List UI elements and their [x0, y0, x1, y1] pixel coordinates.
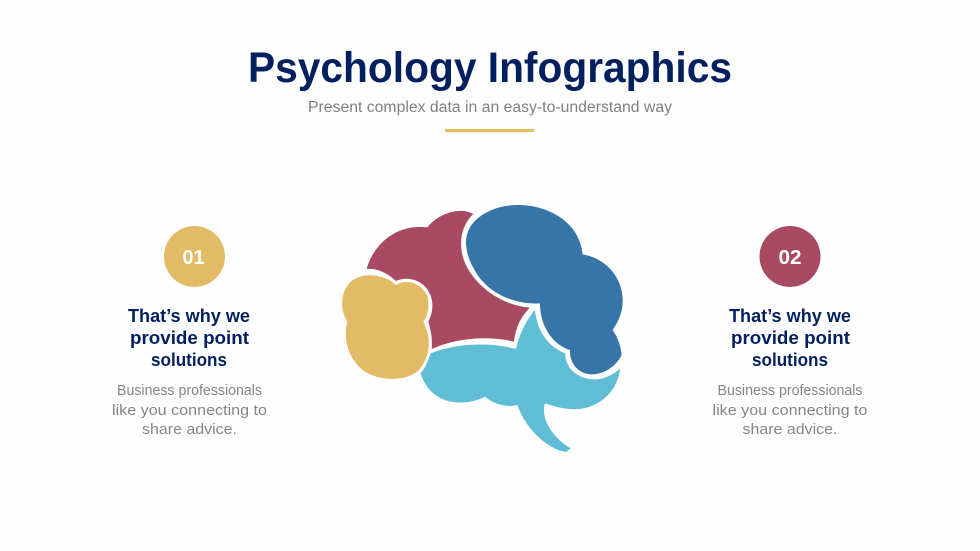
brain lobe: teal: [421, 310, 620, 452]
body text 01: Business professionals: [117, 383, 262, 399]
body text 01: share advice.: [142, 422, 237, 438]
heading 02: solutions: [752, 349, 828, 370]
heading 01: provide point: [130, 327, 249, 348]
body text 02: share advice.: [742, 422, 838, 438]
badge 02: [760, 226, 820, 287]
body text 02: Business professionals: [718, 383, 862, 399]
brain illustration: [342, 205, 623, 452]
brain lobe: red: [367, 211, 530, 349]
badge 02: 02: [778, 247, 802, 269]
brain lobe: blue: [466, 205, 623, 374]
heading 01: solutions: [151, 349, 227, 370]
heading 01: [128, 305, 250, 370]
badge 01: 01: [182, 247, 204, 269]
heading 02: provide point: [731, 327, 850, 348]
heading 02: [729, 305, 851, 370]
body text 01: like you connecting to: [112, 403, 267, 419]
brain lobe: yellow: [342, 275, 429, 379]
heading 01: That’s why we: [128, 305, 250, 326]
panel: point 02: [712, 226, 868, 438]
title underline: [445, 129, 534, 132]
subtitle: Present complex data in an easy-to-understand way: [308, 99, 672, 116]
body text 01: [112, 383, 267, 438]
title: Psychology Infographics: [248, 44, 732, 92]
panel: point 01: [112, 226, 267, 438]
body text 02: like you connecting to: [712, 403, 868, 419]
badge 01: [164, 226, 225, 287]
heading 02: That’s why we: [729, 305, 851, 326]
body text 02: [712, 383, 868, 438]
